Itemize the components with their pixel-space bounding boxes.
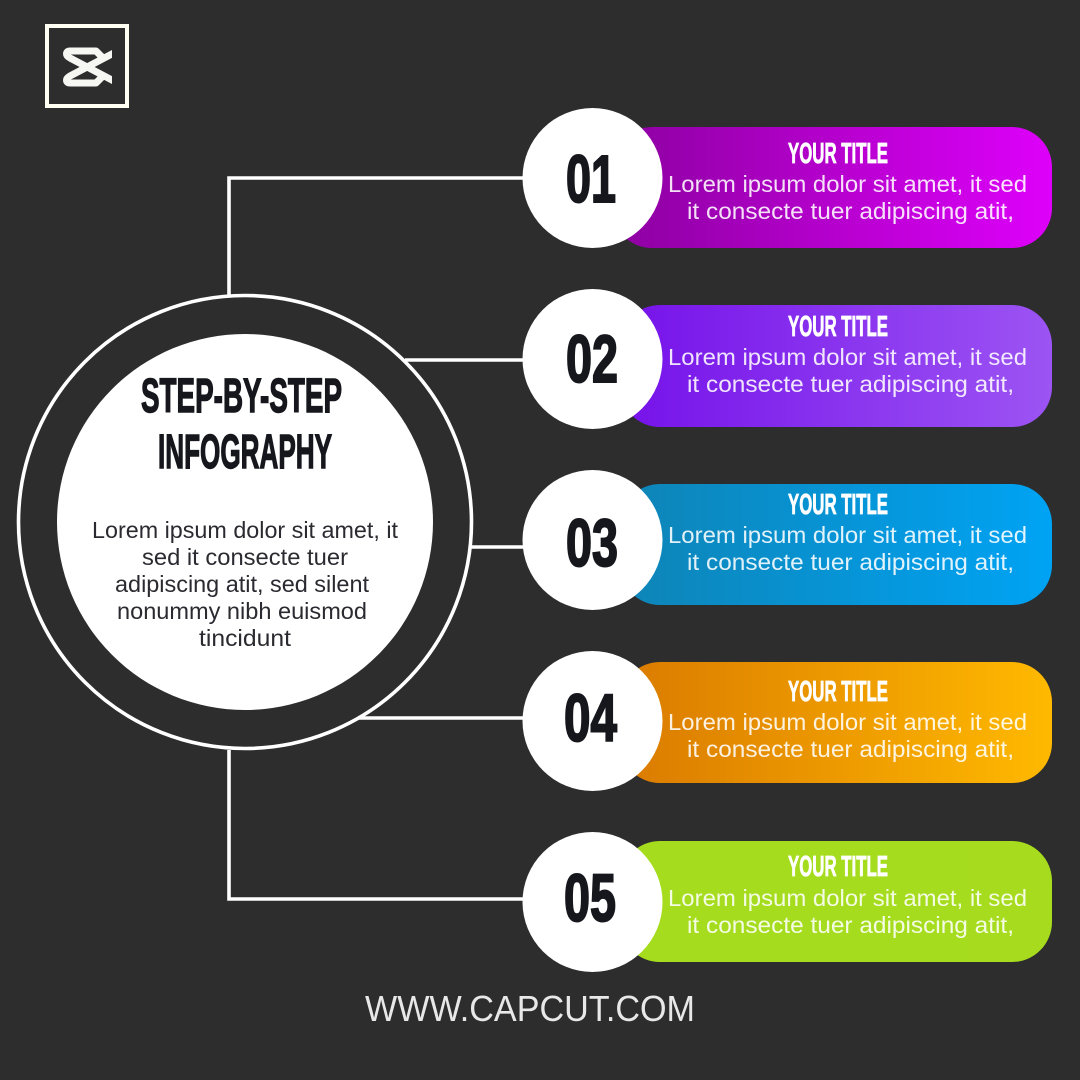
title 01: YOUR TITLE bbox=[788, 138, 888, 170]
step 04 bbox=[522, 651, 1052, 791]
central body text: Lorem ipsum dolor sit amet, it bbox=[92, 517, 399, 543]
number circle 04 bbox=[522, 651, 662, 791]
central body text: tincidunt bbox=[199, 625, 292, 651]
heading: STEP-BY-STEP bbox=[141, 370, 342, 423]
pill 03 bbox=[620, 484, 1052, 605]
text 04: Lorem ipsum dolor sit amet, it sed bbox=[668, 709, 1027, 735]
text 03: it consecte tuer adipiscing atit, bbox=[687, 549, 1014, 575]
number circle 02 bbox=[522, 289, 662, 429]
number circle 03 bbox=[522, 470, 662, 610]
number 04: 04 bbox=[564, 681, 617, 756]
number 05: 05 bbox=[564, 861, 616, 936]
text 04 bbox=[668, 709, 1027, 762]
number 01: 01 bbox=[566, 142, 616, 217]
central body text bbox=[92, 517, 399, 651]
heading bbox=[141, 370, 342, 479]
text 02 bbox=[668, 344, 1027, 397]
text 03: Lorem ipsum dolor sit amet, it sed bbox=[668, 522, 1027, 548]
text 01 bbox=[668, 171, 1027, 224]
text 01: Lorem ipsum dolor sit amet, it sed bbox=[668, 171, 1027, 197]
step 05 bbox=[522, 832, 1052, 972]
text 03 bbox=[668, 522, 1027, 575]
text 05 bbox=[668, 885, 1027, 938]
number circle 01 bbox=[522, 108, 662, 248]
central body text: sed it consecte tuer bbox=[142, 544, 348, 570]
pill 04 bbox=[620, 662, 1052, 783]
logo: CapCut mark in square frame bbox=[47, 26, 127, 106]
footer url: WWW.CAPCUT.COM bbox=[365, 988, 695, 1029]
heading: INFOGRAPHY bbox=[158, 426, 332, 479]
central body text: nonummy nibh euismod bbox=[117, 598, 367, 624]
central circle panel bbox=[18, 296, 472, 748]
title 03: YOUR TITLE bbox=[788, 489, 888, 521]
step 01 bbox=[522, 108, 1052, 248]
text 05: it consecte tuer adipiscing atit, bbox=[687, 912, 1014, 938]
text 04: it consecte tuer adipiscing atit, bbox=[687, 736, 1014, 762]
connector lines bbox=[229, 178, 530, 899]
text 05: Lorem ipsum dolor sit amet, it sed bbox=[668, 885, 1027, 911]
title 04: YOUR TITLE bbox=[788, 676, 888, 708]
number 03: 03 bbox=[566, 506, 618, 581]
central body text: adipiscing atit, sed silent bbox=[115, 571, 370, 597]
title 05: YOUR TITLE bbox=[788, 851, 888, 883]
text 01: it consecte tuer adipiscing atit, bbox=[687, 198, 1014, 224]
pill 05 bbox=[620, 841, 1052, 962]
pill 02 bbox=[620, 305, 1052, 427]
number 02: 02 bbox=[566, 322, 618, 397]
title 02: YOUR TITLE bbox=[788, 311, 888, 343]
number circle 05 bbox=[522, 832, 662, 972]
pill 01 bbox=[612, 127, 1052, 248]
step 03 bbox=[522, 470, 1052, 610]
text 02: Lorem ipsum dolor sit amet, it sed bbox=[668, 344, 1027, 370]
step 02 bbox=[522, 289, 1052, 429]
text 02: it consecte tuer adipiscing atit, bbox=[687, 371, 1014, 397]
